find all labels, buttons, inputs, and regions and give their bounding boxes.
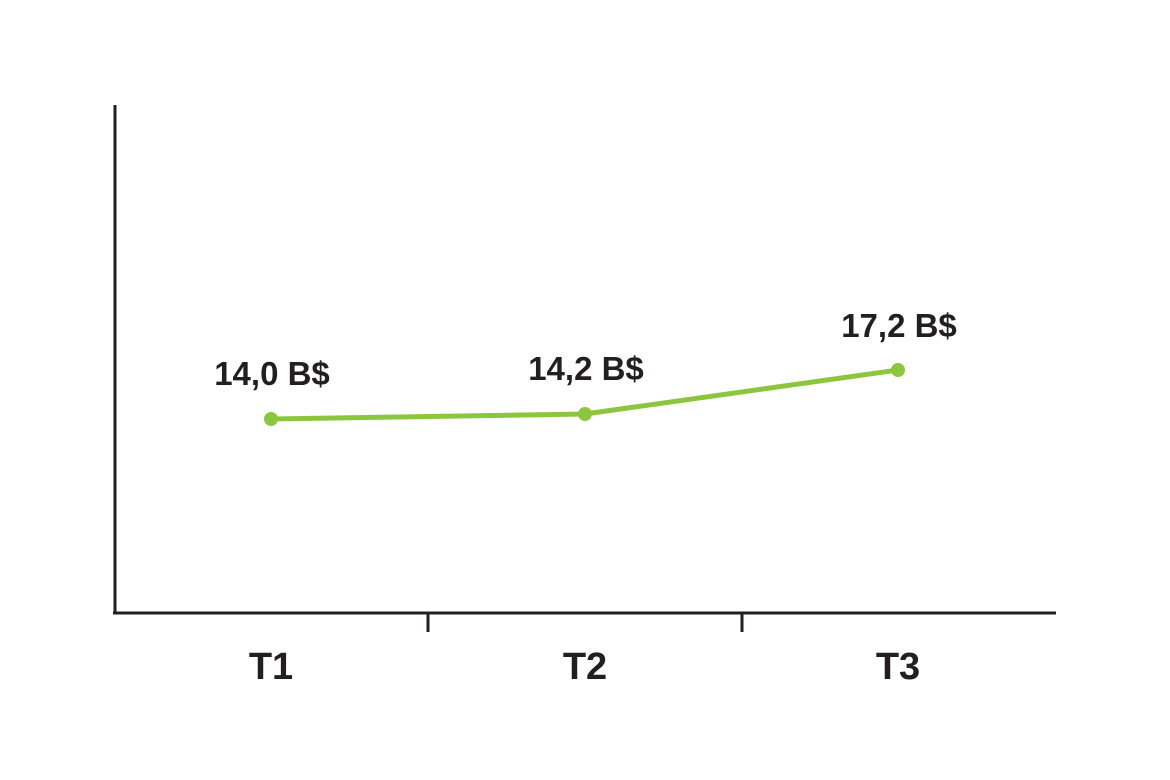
axes: [113, 105, 1056, 632]
value labels: 14,0 B$: [214, 355, 330, 392]
value labels: 17,2 B$: [841, 307, 957, 344]
x-axis labels: T3: [876, 646, 920, 688]
x-axis labels: [249, 646, 920, 688]
x-axis labels: T2: [563, 646, 607, 688]
value labels: [214, 307, 957, 392]
data line: [264, 363, 905, 426]
x-axis labels: T1: [249, 646, 293, 688]
value labels: 14,2 B$: [528, 350, 644, 387]
